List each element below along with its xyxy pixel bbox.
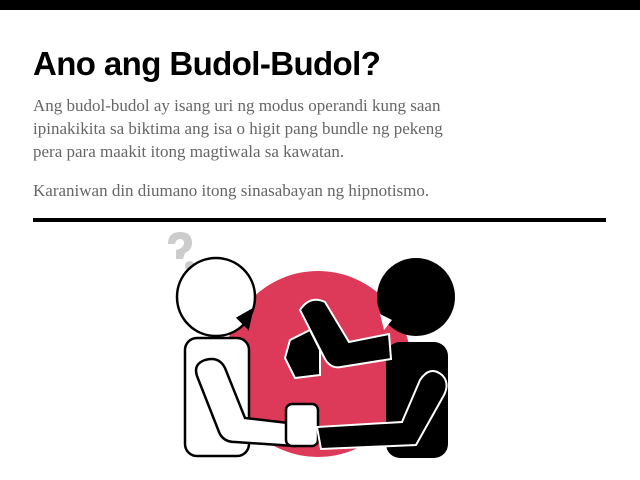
victim figure (white) [177,258,318,456]
title: Ano ang Budol-Budol? [33,45,380,82]
red circle [225,271,411,457]
question mark icon [168,232,195,271]
top bar [0,0,640,10]
description text: Karaniwan din diumano itong sinasabayan ng hipnotismo. [33,181,429,200]
description text: Ang budol-budol ay isang uri ng modus operandi kung saan ipinakikita sa biktima ang isa o higit pang bundle ng pekeng pera para maakit itong magtiwala sa kawatan. [33,96,443,161]
con artist figure (black) [285,258,455,458]
description text [33,96,443,200]
divider rule [33,218,606,222]
